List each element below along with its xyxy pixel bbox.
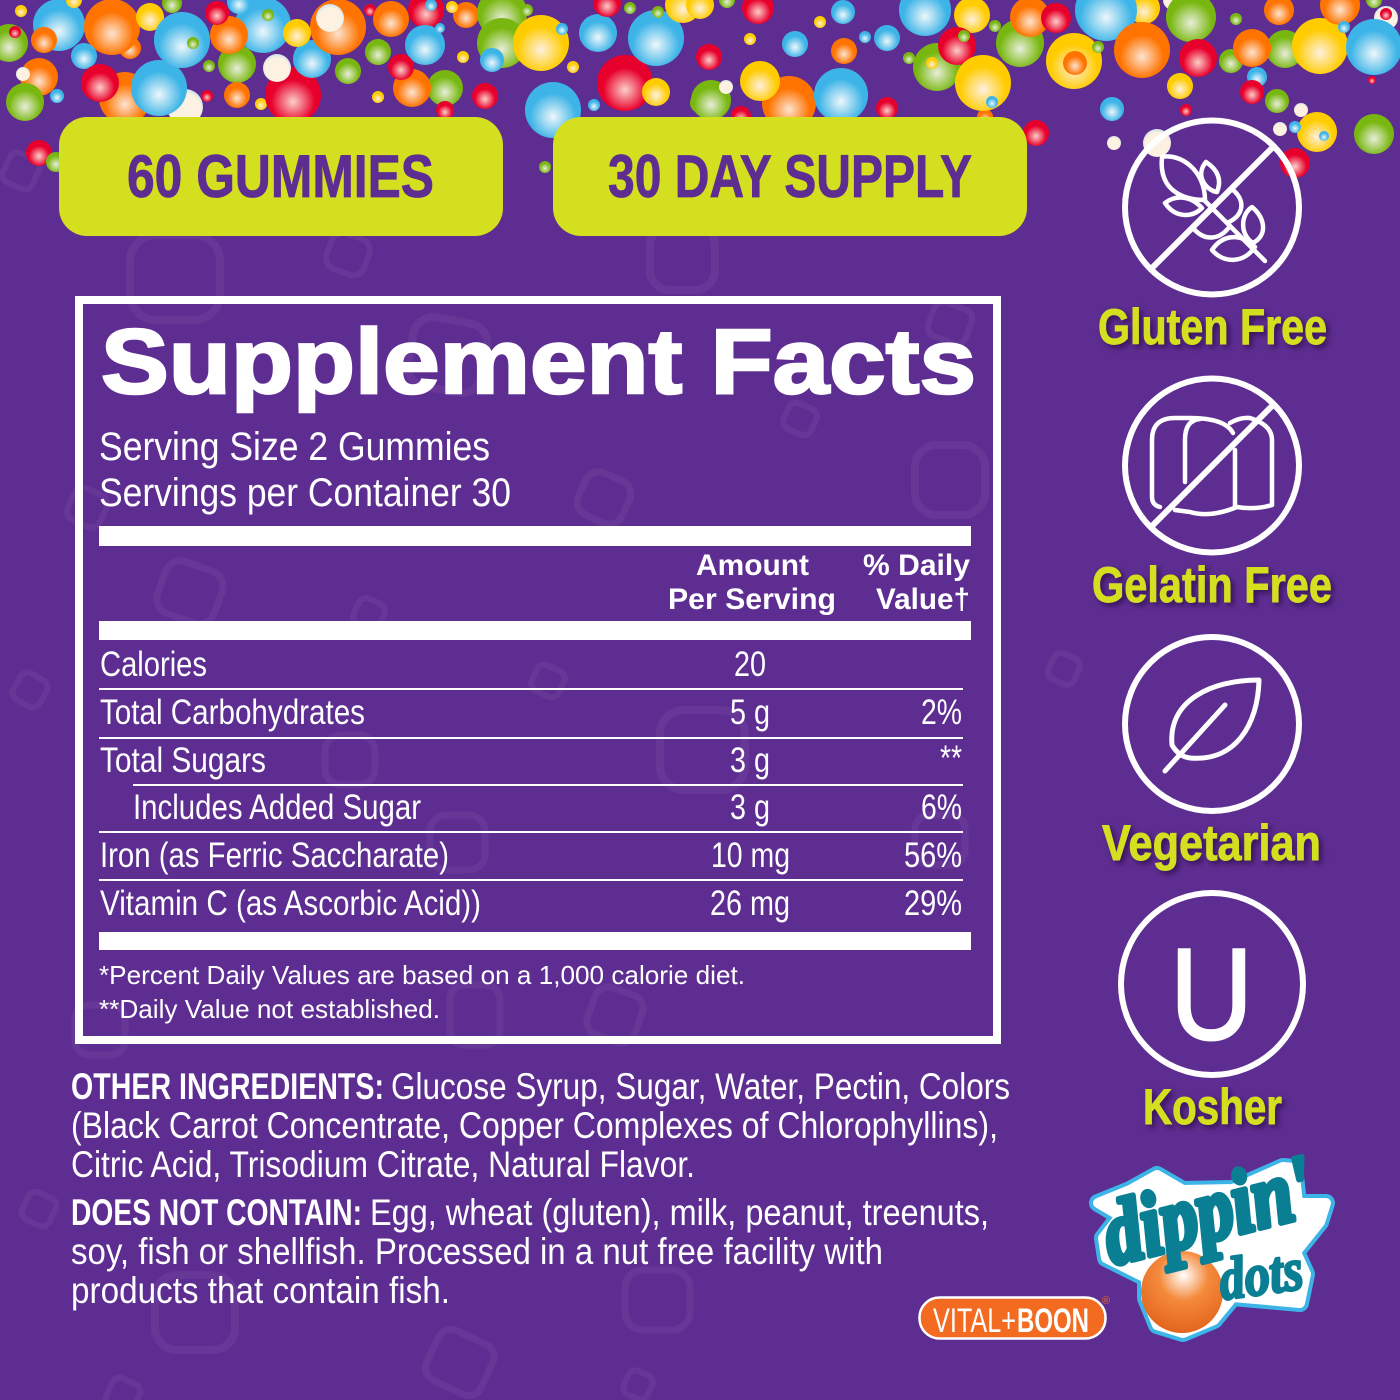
- other ingredients text: OTHER INGREDIENTS:: [71, 1066, 384, 1107]
- icon: gelatin free: [1125, 378, 1299, 552]
- other ingredients text: Glucose Syrup, Sugar, Water, Pectin, Colors: [391, 1066, 1010, 1107]
- thick rule bottom: [99, 932, 971, 950]
- nutrient table rows: Iron (as Ferric Saccharate): [100, 836, 449, 875]
- nutrient table rows: 3 g: [730, 741, 770, 780]
- column headers: Per Serving: [668, 583, 836, 616]
- logo: vital boon: VITAL+: [933, 1302, 1016, 1340]
- icon: kosher: U: [1170, 921, 1253, 1067]
- serving information: [99, 425, 511, 515]
- badge: 60 gummies: 60 GUMMIES: [127, 143, 434, 210]
- label: kosher: Kosher: [1143, 1079, 1282, 1135]
- icon: kosher: [1121, 893, 1303, 1075]
- nutrient table rows: **: [940, 739, 962, 778]
- serving information: Serving Size 2 Gummies: [99, 425, 490, 469]
- does not contain text: products that contain fish.: [71, 1270, 450, 1311]
- nutrient table rows: [99, 645, 963, 923]
- nutrient table rows: 29%: [904, 884, 962, 923]
- other ingredients text: Citric Acid, Trisodium Citrate, Natural Flavor.: [71, 1144, 695, 1185]
- nutrient table rows: Total Carbohydrates: [100, 693, 365, 732]
- does not contain text: DOES NOT CONTAIN:: [71, 1192, 362, 1233]
- column headers: % Daily: [863, 549, 970, 582]
- nutrient table rows: 5 g: [730, 693, 770, 732]
- serving information: Servings per Container 30: [99, 471, 511, 515]
- column headers: [668, 549, 970, 616]
- nutrient table rows: 10 mg: [711, 836, 790, 875]
- logo: vital boon: ®: [1102, 1295, 1110, 1307]
- panel: supplement facts: [79, 300, 997, 1040]
- logo: vital boon: [920, 1295, 1110, 1340]
- thick rule middle: [99, 621, 971, 640]
- badge: 30 day supply: 30 DAY SUPPLY: [608, 143, 972, 210]
- column headers: Value†: [876, 583, 970, 616]
- other ingredients text: (Black Carrot Concentrate, Copper Complexes of Chlorophyllins),: [71, 1105, 998, 1146]
- icon: vegetarian leaf: [1125, 637, 1299, 811]
- label: gelatin free: Gelatin Free: [1092, 557, 1332, 613]
- other ingredients text: [71, 1066, 1010, 1185]
- badge: 30 day supply: [553, 117, 1027, 236]
- nutrient table rows: 26 mg: [710, 884, 790, 923]
- does not contain text: [71, 1192, 989, 1311]
- logo: dippin dots: dippin': [1093, 1137, 1323, 1284]
- does not contain text: soy, fish or shellfish. Processed in a nut free facility with: [71, 1231, 883, 1272]
- decorative dots banner: [0, 0, 1400, 178]
- icon: gluten free: [1125, 120, 1299, 294]
- label: vegetarian: Vegetarian: [1102, 815, 1321, 871]
- badge: 60 gummies: [59, 117, 503, 236]
- does not contain text: Egg, wheat (gluten), milk, peanut, treenuts,: [370, 1192, 989, 1233]
- label: gluten free: Gluten Free: [1098, 299, 1327, 355]
- nutrient table rows: Vitamin C (as Ascorbic Acid)): [100, 884, 481, 923]
- nutrient table rows: Includes Added Sugar: [133, 788, 421, 827]
- footnotes: **Daily Value not established.: [99, 994, 440, 1024]
- nutrient table rows: 3 g: [730, 788, 770, 827]
- nutrient table rows: Total Sugars: [100, 741, 266, 780]
- column headers: Amount: [696, 549, 809, 582]
- logo: dippin dots: [1093, 1137, 1326, 1333]
- footnotes: [99, 960, 745, 1024]
- nutrient table rows: 2%: [921, 693, 962, 732]
- heading: supplement facts: Supplement Facts: [101, 311, 976, 413]
- logo: vital boon: BOON: [1017, 1302, 1089, 1340]
- footnotes: *Percent Daily Values are based on a 1,000 calorie diet.: [99, 960, 745, 990]
- nutrient table rows: 6%: [921, 788, 962, 827]
- nutrient table rows: 20: [734, 645, 766, 684]
- thick rule top: [99, 526, 971, 546]
- nutrient table rows: 56%: [904, 836, 962, 875]
- logo: dippin dots: dots: [1215, 1236, 1307, 1313]
- nutrient table rows: Calories: [100, 645, 207, 684]
